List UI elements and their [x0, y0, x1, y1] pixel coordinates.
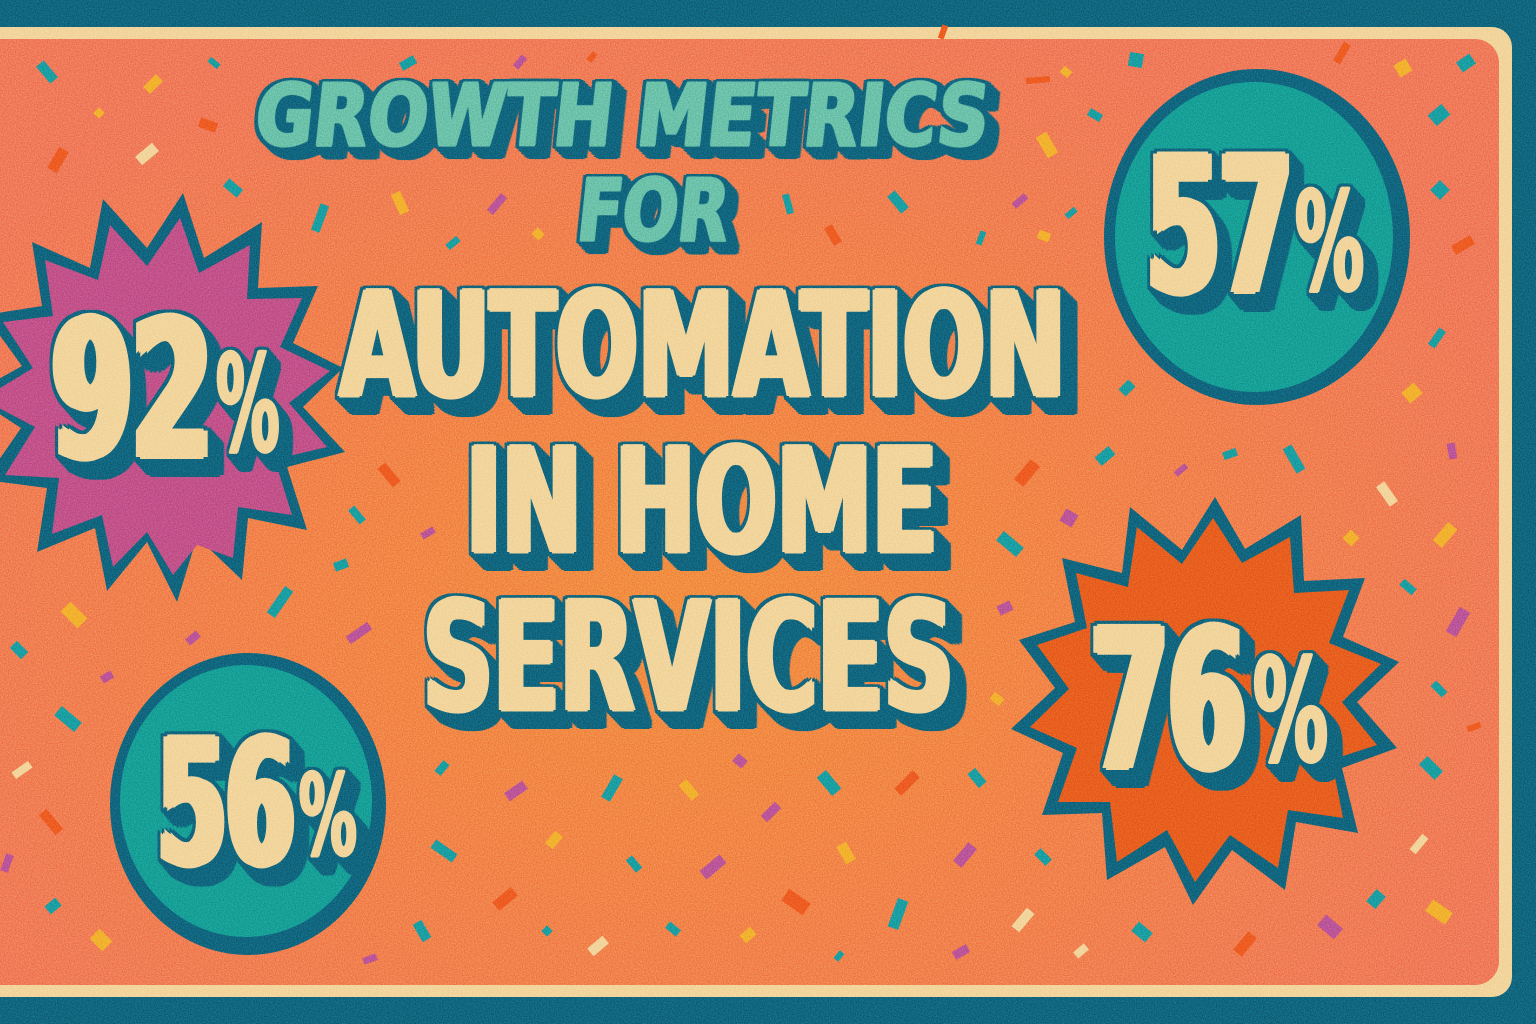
badge: 92% starburst	[0, 193, 345, 602]
icon: teal circle	[110, 653, 386, 955]
number: 57: 57	[1147, 116, 1292, 337]
number: 56: 56	[158, 703, 294, 906]
percent sign: %	[1253, 627, 1328, 795]
percent sign: %	[216, 326, 280, 483]
number: 92: 92	[52, 280, 212, 503]
title line: For: FOR	[573, 162, 734, 261]
title line: In Home: IN HOME	[466, 417, 937, 587]
title line: Growth Metrics: GROWTH METRICS	[251, 67, 994, 166]
percent sign: %	[1295, 162, 1364, 323]
percent sign: %	[299, 750, 357, 882]
badge: 57% circle	[1104, 69, 1410, 405]
icon: teal circle	[1104, 69, 1410, 405]
number: 76: 76	[1091, 587, 1246, 814]
title	[251, 67, 1078, 746]
icon: orange starburst	[1011, 497, 1399, 905]
icon: magenta starburst	[0, 193, 345, 602]
badge: 56% circle	[110, 653, 386, 955]
badge: 76% starburst	[1011, 497, 1399, 905]
title line: Services: SERVICES	[423, 569, 954, 746]
title line: Automation: AUTOMATION	[340, 261, 1066, 431]
